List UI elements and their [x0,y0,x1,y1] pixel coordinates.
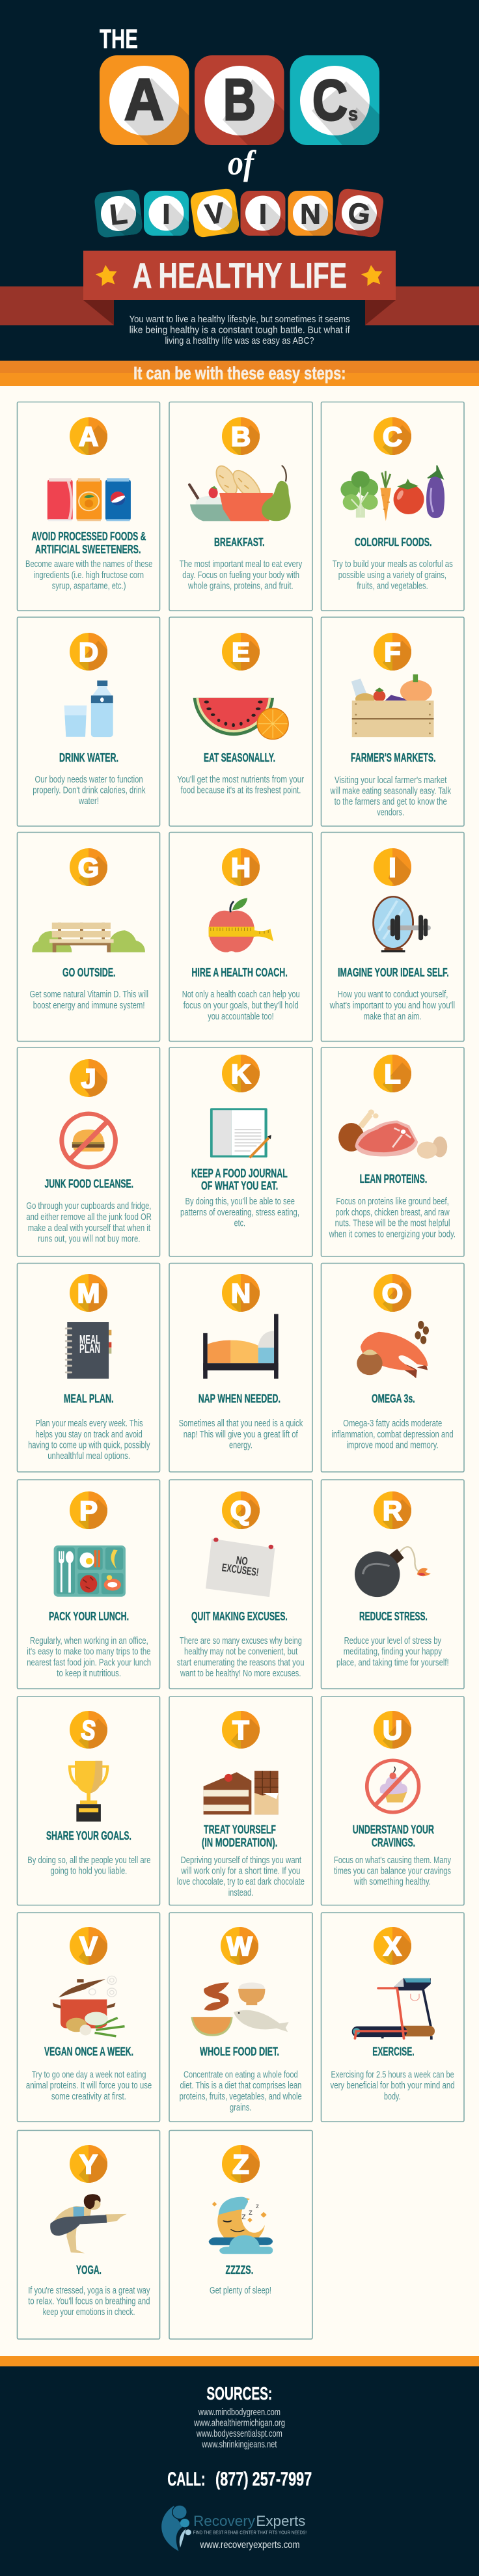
body text: it's easy to make too many trips to the [27,1646,150,1657]
body text: going to hold you liable. [51,1865,127,1876]
panel: B [169,402,312,611]
heading: AVOID PROCESSED FOODS & [31,529,146,543]
icon: breakfast [189,463,291,521]
panel: T [169,1697,312,1905]
badge: A [70,417,137,486]
icon: yoga pose [50,2194,127,2253]
badge: D: D [79,637,98,667]
body text [331,2069,455,2102]
body text: food because it's at its freshest point. [181,784,301,796]
heading: PACK YOUR LUNCH. [49,1609,129,1623]
body text [26,2069,152,2102]
body text: you accountable too! [208,1011,274,1022]
icon: park bench [32,922,145,952]
badge: P [70,1491,137,1560]
sources list [193,2407,285,2450]
icon: lean proteins [338,1109,447,1159]
body text: properly. Don't drink calories, drink [33,784,146,796]
band: easy steps: It can be with these easy steps: [133,363,346,383]
heading: SHARE YOUR GOALS. [46,1829,131,1842]
heading: EXERCISE. [372,2045,415,2058]
badge: X [374,1927,441,1996]
badge: M [70,1274,137,1343]
badge: W [221,1927,288,1996]
panel: E [169,617,312,826]
body text: to keep it nutritious. [57,1668,121,1679]
icon: soda cans [48,478,131,521]
icon: meal plan notebook [66,1322,111,1379]
heading: REDUCE STRESS. [359,1609,428,1623]
badge: M: M [77,1278,100,1309]
panel: Z [169,2130,312,2339]
heading: OMEGA 3s. [372,1392,415,1406]
icon: no excuses note: EXCUSES! [221,1561,260,1579]
badge: W: W [226,1931,253,1961]
body text [177,1855,305,1898]
badge: Y [70,2145,137,2214]
icon: market crate [351,674,434,737]
badge: E [222,633,290,702]
body text: and either remove all the junk food OR [26,1212,152,1223]
body text: boost energy and immune system! [33,1000,145,1011]
heading: OF WHAT YOU EAT. [201,1179,278,1193]
badge: Q [222,1491,290,1560]
panel: J [17,1047,160,1256]
title tiles: ABCs [100,55,379,145]
body text [33,774,146,807]
body text: Depriving yourself of things you want [181,1855,302,1866]
body text: improve mood and memory. [346,1440,439,1451]
band: easy steps [0,361,479,386]
badge: T: T [232,1715,249,1745]
header background [0,0,479,361]
icon: no junk food [62,1114,115,1167]
body text: with something healthy. [353,1876,431,1887]
body text: possible using a variety of grains, [338,570,446,581]
icon: bed [203,1314,279,1379]
icon: salmon and nut [357,1321,429,1378]
title word: THE: THE [100,23,138,54]
heading: TREAT YOURSELF [204,1822,276,1836]
heading [31,529,146,556]
panel: O [322,1263,464,1472]
heading: (IN MODERATION). [202,1835,277,1849]
body text: focus on your goals, but they'll hold [184,1000,299,1011]
logo: Recovery Experts: Recovery [193,2513,255,2529]
badge: J: J [81,1063,96,1094]
badge: N [222,1274,290,1343]
badge: Z: Z [232,2149,249,2180]
title tiles: LIVING: G [346,197,372,231]
ribbon banner: A HEALTHY LIFE [0,251,479,325]
icon: sleeping moon: z [256,2203,259,2210]
body text: will work only for a short time. If you [181,1865,301,1876]
body text: nap! This will give you a great lift of [184,1429,298,1440]
icon: vegetables [340,465,445,521]
body text: energy. [229,1440,253,1451]
icon: mirror and dumbbell [374,896,431,952]
body text: make that an aim. [364,1011,421,1022]
badge: A: A [79,421,98,452]
heading [353,1822,434,1849]
body text: helps you stay on track and avoid [35,1429,143,1440]
heading: DRINK WATER. [59,751,118,764]
body text: body. [384,2091,401,2102]
body text [27,1635,151,1679]
panel: K [169,1047,312,1256]
heading: MEAL PLAN. [64,1392,114,1406]
body text [180,559,303,591]
body text: By doing this, you'll be able to see [185,1196,295,1207]
body text: You'll get the most nutrients from your [177,774,304,785]
badge: L [374,1055,441,1124]
badge: R [374,1491,441,1560]
icon: cake and chocolate [204,1771,279,1814]
badge: N: N [231,1278,251,1309]
badge: U [374,1711,441,1780]
body text: Go through your cupboards and fridge, [26,1200,151,1212]
body text: By doing so, all the people you tell are [27,1855,150,1866]
panel: Q [169,1480,312,1689]
sources list: www.shrinkingjeans.net [202,2439,277,2450]
heading: NAP WHEN NEEDED. [198,1392,281,1406]
heading: ARTIFICIAL SWEETENERS. [35,542,141,556]
badge: I [374,848,435,917]
call line [167,2469,312,2490]
body text: patterns of overeating, stress eating, [180,1207,299,1218]
footer background [0,2366,479,2576]
body text [30,989,148,1011]
body text: There are so many excuses why being [180,1635,302,1646]
call line: (877) 257-7997 [215,2469,312,2490]
heading: WHOLE FOOD DIET. [200,2045,279,2058]
body text [329,989,455,1022]
badge: B [222,417,290,486]
heading: GO OUTSIDE. [62,965,116,979]
panel: H [169,832,312,1042]
panel: V [17,1913,160,2122]
body text [333,559,453,591]
title tiles: ABCs: C [312,68,348,132]
body text: start enumerating the reasons that you [177,1657,305,1668]
badge: E: E [232,637,250,667]
title word: of: of [228,143,256,182]
badge: G [70,848,137,917]
body text: Not only a health coach can help you [182,989,300,1000]
sources heading: SOURCES: [206,2383,272,2403]
heading: EAT SEASONALLY. [204,751,275,764]
sources list: www.bodyessentialspt.com [196,2428,282,2439]
body text: day. Focus on fueling your body with [182,570,299,581]
body text: Plan your meals every week. This [35,1418,143,1429]
panel: I [322,832,464,1042]
panel: M [17,1263,160,1472]
icon: meal plan notebook: MEAL [79,1333,100,1346]
badge: T [222,1711,290,1780]
icon: lunch tray [54,1545,126,1597]
icon: food journal [210,1108,271,1157]
body text: water! [78,796,99,807]
panel: X [322,1913,464,2122]
title tiles: LIVING: N [300,198,321,230]
body text: to the farmers and get to know the [335,796,447,807]
icon: sleeping moon: z [249,2208,253,2217]
body text: Reduce your level of stress by [344,1635,441,1646]
body text [26,1200,152,1245]
icon: watermelon and orange [193,698,288,740]
body text: keep your emotions in check. [43,2306,135,2318]
badge: O: O [382,1278,403,1309]
badge: C: C [383,421,402,452]
badge: K [222,1055,290,1124]
icon: treadmill [352,1978,435,2040]
body text: Regularly, when working in an office, [30,1635,148,1646]
title tiles: LIVING: V [203,197,227,231]
badge: S: S [79,1714,98,1746]
call line: CALL: [167,2469,206,2490]
panel: L [322,1047,464,1256]
badge: F [374,633,441,702]
badge: B: B [231,421,251,452]
heading: BREAKFAST. [214,535,265,549]
logo: Recovery Experts: Experts [256,2513,305,2529]
icon: water [64,680,113,737]
body text: healthy may not be convenient, but [184,1646,298,1657]
logo: Recovery Experts: FIND THE BEST REHAB CENTER THAT FITS YOUR NEEDS! [193,2529,307,2535]
icon: meal plan notebook: PLAN [79,1342,100,1355]
heading: VEGAN ONCE A WEEK. [44,2045,133,2058]
body text: Get some natural Vitamin D. This will [30,989,148,1000]
ribbon banner: A HEALTHY LIFE: A HEALTHY LIFE [133,255,347,296]
panel: U [322,1697,464,1905]
body text [336,1635,449,1668]
body text [330,775,451,818]
panel: P [17,1480,160,1689]
body text: Our body needs water to function [35,774,143,785]
title tiles: LIVING [95,189,384,237]
body text: runs out, you will not buy more. [38,1234,141,1245]
body text: unhealthful meal options. [48,1450,130,1461]
body text [180,2069,302,2113]
body text: nearest fast food join. Pack your lunch [27,1657,151,1668]
body text [182,989,300,1022]
icon: bomb [355,1547,431,1597]
body text [25,559,152,591]
body text: Get plenty of sleep! [210,2285,271,2296]
intro text: You want to live a healthy lifestyle, but sometimes it seems [130,314,350,325]
badge: D [70,633,137,702]
badge: G: G [78,852,99,883]
badge: Y: Y [79,2149,98,2180]
body text: syrup, aspartame, etc.) [52,580,126,591]
body text [180,1196,299,1229]
icon: no cupcake [367,1760,419,1812]
panel: A [17,402,160,611]
panel: G [17,832,160,1042]
badge: U: U [383,1715,402,1745]
intro text: living a healthy life was as easy as ABC? [165,335,314,346]
body text: Become aware with the names of these [25,559,152,570]
body text: Visiting your local farmer's market [335,775,447,786]
heading: COLORFUL FOODS. [355,535,431,549]
badge: H [222,848,290,917]
body text: If you're stressed, yoga is a great way [28,2285,150,2296]
title tiles: LIVING: L [108,198,129,231]
body text [334,1855,451,1887]
title tiles: ABCs: s [348,104,358,125]
body text [177,774,304,796]
badge: I: I [389,852,396,883]
icon: apple and tape [209,898,273,952]
icon: no excuses note [206,1538,275,1597]
body text: animal proteins. It will force you to use [26,2080,152,2091]
heading: CRAVINGS. [372,1835,415,1849]
badge: Z [222,2145,290,2214]
icon: sleeping moon [209,2197,273,2254]
title tiles: ABCs: A [124,68,164,133]
badge: V: V [79,1931,98,1961]
panel: R [322,1480,464,1689]
sources list: www.ahealthiermichigan.org [193,2418,285,2429]
panel: Y [17,2130,160,2339]
intro text [130,314,350,346]
badge: V [70,1927,137,1996]
body text: Try to go one day a week not eating [32,2069,146,2081]
logo: Recovery Experts [161,2505,307,2551]
badge: P: P [79,1495,98,1526]
heading [202,1822,277,1849]
heading: FARMER'S MARKETS. [351,751,436,764]
heading: UNDERSTAND YOUR [353,1822,434,1836]
panel: C [322,402,464,611]
body text: instead. [228,1887,253,1898]
icon: whole foods [191,1982,289,2036]
body text: ingredients (i.e. high fructose corn [34,570,144,581]
body text [27,1855,150,1876]
badge: C [374,417,441,486]
heading: JUNK FOOD CLEANSE. [44,1177,133,1191]
panel: S [17,1697,160,1905]
badge: K: K [231,1059,251,1089]
body text: to relax. You'll focus on breathing and [28,2296,150,2307]
panel: W [169,1913,312,2122]
body text: Concentrate on eating a whole food [184,2069,298,2081]
badge: O [374,1274,441,1343]
icon: trophy [70,1761,107,1821]
badge: H: H [231,852,251,883]
badge: R: R [383,1495,402,1526]
icon: pot of vegetables [53,1976,125,2036]
body text [28,2285,150,2318]
title tiles: LIVING: I [259,198,267,230]
heading: ZZZZS. [225,2263,253,2277]
body text: etc. [234,1218,245,1229]
body text [331,1418,454,1451]
body text: vendors. [377,807,404,818]
body text: want to be healthy! No more excuses. [180,1668,301,1679]
body text: diet. This is a diet that comprises lean [180,2080,301,2091]
sources list: www.mindbodygreen.com [198,2407,281,2418]
badge: L: L [384,1059,401,1089]
body text: proteins, fruits, vegetables, and whole [180,2091,302,2102]
body text: The most important meal to eat every [180,559,303,570]
heading: HIRE A HEALTH COACH. [191,965,288,979]
heading: LEAN PROTEINS. [360,1172,427,1185]
body text: whole grains, proteins, and fruit. [187,580,294,591]
panel: F [322,617,464,826]
body text: fruits, and vegetables. [357,580,428,591]
body text: some creativity at first. [51,2091,126,2102]
icon: no excuses note: NO [236,1554,249,1568]
body text [28,1418,150,1461]
heading: YOGA. [76,2263,102,2277]
body text: love chocolate, try to eat dark chocolate [177,1876,305,1887]
intro text: like being healthy is a constant tough battle. But what if [130,325,350,336]
heading: KEEP A FOOD JOURNAL [191,1166,288,1180]
body text [177,1635,305,1679]
icon: sleeping moon: z [241,2211,246,2221]
body text [329,1196,456,1240]
badge: S [70,1711,137,1780]
body text: Sometimes all that you need is a quick [179,1418,303,1429]
body text [179,1418,303,1451]
badge: J [70,1059,131,1128]
body text: meditating, finding your happy [344,1646,442,1657]
logo: Recovery Experts: www.recoveryexperts.com [200,2540,299,2551]
title tiles: ABCs: B [223,68,256,133]
heading [191,1166,288,1193]
badge: X: X [383,1931,402,1961]
body text: grains. [230,2102,251,2113]
body text: Omega-3 fatty acids moderate [343,1418,442,1429]
title tiles: LIVING: I [162,198,171,230]
footer band [0,2356,479,2366]
panel: D [17,617,160,826]
body text: make a deal with yourself that when it [28,1223,151,1234]
body text: having to come up with quick, possibly [28,1440,150,1451]
heading: QUIT MAKING EXCUSES. [191,1609,288,1623]
badge: Q: Q [230,1495,251,1526]
badge: F: F [384,637,401,667]
panel: N [169,1263,312,1472]
